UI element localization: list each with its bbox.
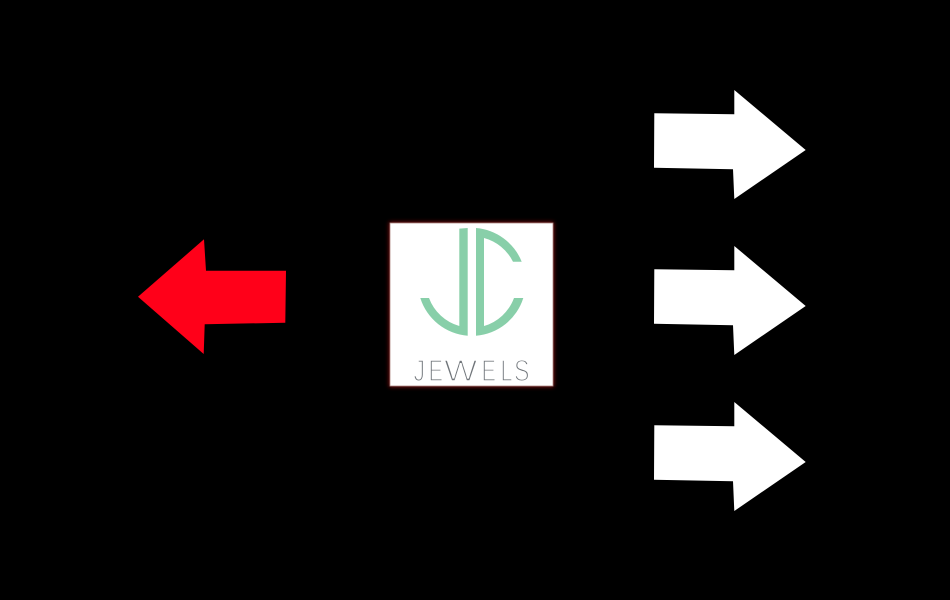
brand name: S xyxy=(514,353,530,388)
brand name: L xyxy=(500,353,513,388)
arrow: red left xyxy=(138,239,286,354)
arrow: white right top xyxy=(654,90,806,199)
brand name: E xyxy=(428,353,443,388)
brand name: W xyxy=(444,354,478,388)
brand name: J xyxy=(414,353,425,388)
brand name xyxy=(414,353,530,388)
arrow: white right middle xyxy=(654,246,806,355)
icon: C monogram xyxy=(476,228,523,336)
brand name: E xyxy=(482,353,496,388)
arrow: white right bottom xyxy=(654,402,806,511)
icon: J monogram xyxy=(420,228,468,336)
logo: JC Jewels xyxy=(389,222,554,388)
